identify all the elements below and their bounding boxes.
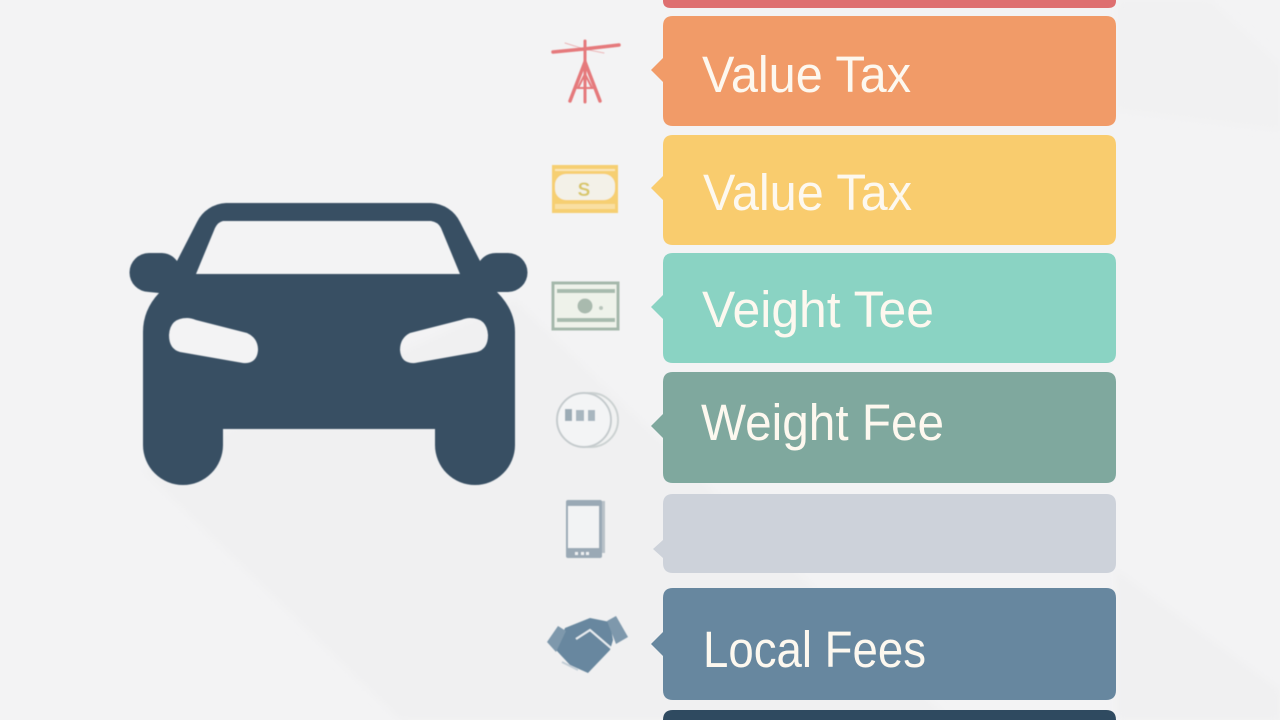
icon: red tower with rotor: [553, 41, 619, 102]
panel: teal bar: [651, 253, 1116, 363]
panel: navy bar (bottom): [663, 710, 1116, 720]
icon: car front view: [130, 203, 528, 485]
panel: yellow bar: [651, 135, 1116, 245]
icon: handshake: [547, 616, 628, 673]
panel: grey empty bar: [653, 494, 1116, 573]
label: Weight Fee: Weight Fee: [701, 394, 944, 451]
icon: green banknote: [553, 283, 618, 329]
label: Value Tax: Value Tax: [703, 164, 912, 221]
label: Veight Tee: Veight Tee: [702, 281, 934, 338]
dollar mark: S: [578, 180, 590, 201]
panel: sage green bar: [651, 372, 1116, 483]
label: Value Tax: Value Tax: [702, 46, 911, 103]
label: Local Fees: Local Fees: [703, 621, 926, 678]
panel: orange bar: [651, 16, 1116, 126]
panel: blue bar: [651, 588, 1116, 700]
icon: yellow banknote: [552, 165, 618, 213]
icon: coins: [557, 393, 618, 447]
panel: red bar (top): [663, 0, 1116, 8]
icon: tablet: [566, 500, 605, 558]
